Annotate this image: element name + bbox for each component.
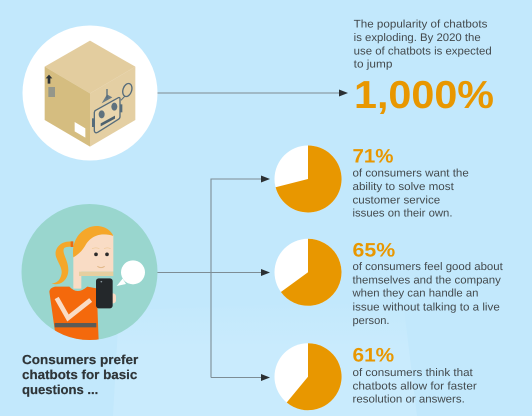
stat block: 65%: of consumers feel good about (352, 261, 503, 273)
text: popularity of chatbots intro: The popularity of chatbots (354, 19, 488, 31)
text: popularity of chatbots intro: to jump (354, 59, 392, 71)
pie chart: 65% (274, 239, 342, 306)
stat block: 65%: when they can handle an (351, 288, 478, 300)
stat block: 65% (351, 240, 503, 327)
text: popularity of chatbots intro: use of chatbots is expected (354, 45, 492, 57)
pie chart: 71% (274, 145, 342, 212)
icon: woman using a smartphone (22, 204, 158, 341)
stat block: 71%: ability to solve most (352, 181, 454, 193)
stat block: 65%: person. (352, 315, 390, 327)
icon: robot in a cardboard box (22, 26, 158, 160)
stat block: 71%: of consumers want the (352, 167, 469, 179)
text: consumers prefer chatbots heading (22, 352, 138, 397)
stat block: 61%: 61% (352, 345, 394, 367)
stat block: 65%: themselves and the company (352, 274, 501, 286)
text: consumers prefer chatbots heading: questions ... (22, 382, 98, 397)
pie chart: 61% (274, 343, 342, 410)
stat block: 61% (352, 345, 477, 406)
text: consumers prefer chatbots heading: Consumers prefer (22, 352, 138, 367)
stat block: 71%: 71% (352, 146, 394, 168)
stat block: 65%: 65% (352, 240, 395, 262)
stat: 1,000%: 1,000% (354, 74, 494, 117)
icon: speech bubble (117, 260, 145, 286)
stat block: 71%: customer service (352, 194, 440, 206)
connector tree: consumer to three pie charts (157, 176, 270, 381)
stat block: 61%: resolution or answers. (352, 394, 465, 406)
stat block: 61%: of consumers think that (352, 367, 473, 379)
text: popularity of chatbots intro (354, 19, 492, 71)
stat block: 71% (352, 146, 469, 220)
text: consumers prefer chatbots heading: chatbots for basic (22, 367, 137, 382)
text: popularity of chatbots intro: is exploding. By 2020 the (354, 32, 481, 44)
stat block: 61%: chatbots allow for faster (352, 380, 477, 392)
stat block: 65%: issue without talking to a live (352, 301, 500, 313)
stat block: 71%: issues on their own. (352, 208, 452, 220)
connector: box to 1,000% (157, 90, 348, 96)
